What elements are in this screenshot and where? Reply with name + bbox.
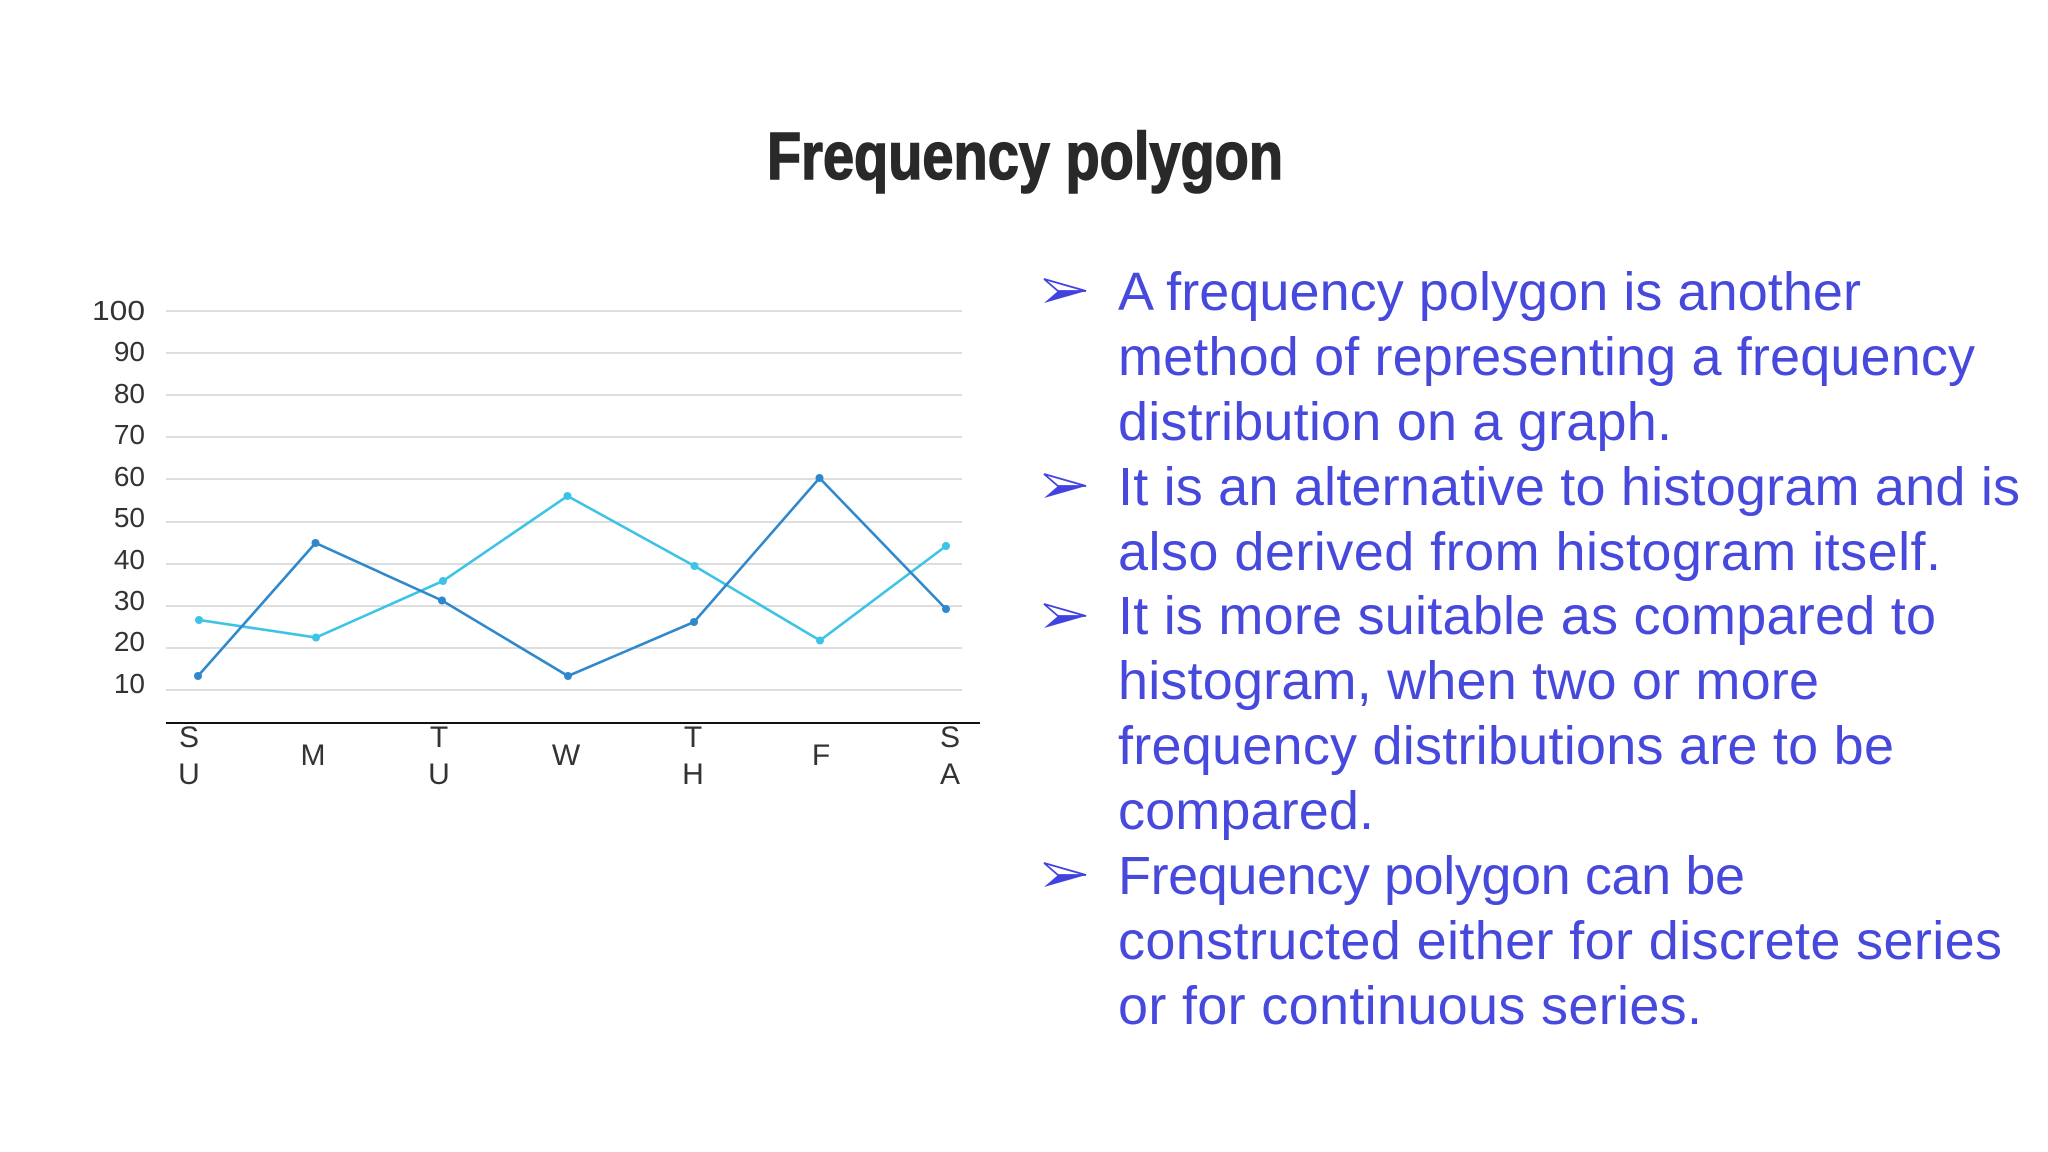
x axis labels: A (940, 758, 960, 791)
y axis labels: 10 (114, 668, 145, 699)
line chart (92, 295, 980, 791)
series: light blue line (195, 492, 950, 644)
title: Frequency polygon (767, 119, 1283, 194)
text: point 4: or for continuous series. (1118, 976, 1702, 1036)
x axis labels: S (940, 721, 960, 754)
x axis labels: W (552, 739, 581, 772)
x axis labels: S (179, 721, 199, 754)
y axis labels: 80 (114, 378, 145, 409)
text: point 3: It is more suitable as compared to (1118, 586, 1936, 646)
icon: bullet arrow 4 (1044, 863, 1086, 887)
text: point 2 (1118, 457, 2020, 582)
y axis labels: 30 (114, 585, 145, 616)
text: point 4: Frequency polygon can be (1118, 846, 1745, 906)
y axis labels: 50 (114, 502, 145, 533)
text: point 4: constructed either for discrete series (1118, 911, 2002, 971)
x axis labels: F (812, 739, 830, 772)
x axis labels (178, 721, 960, 791)
text: point 3: frequency distributions are to be (1118, 716, 1894, 776)
y axis labels (92, 295, 145, 699)
x axis labels: M (300, 739, 326, 772)
text: point 4 (1118, 846, 2002, 1036)
text: point 3 (1118, 586, 1936, 841)
text: point 2: also derived from histogram itself. (1118, 522, 1941, 582)
text: point 2: It is an alternative to histogram and is (1118, 457, 2020, 517)
text: point 3: histogram, when two or more (1118, 651, 1819, 711)
y axis labels: 60 (114, 461, 145, 492)
text: point 1 (1118, 262, 1975, 452)
series: dark blue line (194, 474, 950, 680)
y axis labels: 70 (114, 419, 145, 450)
x axis labels: T (430, 721, 448, 754)
y axis labels: 40 (114, 544, 145, 575)
x axis labels: H (682, 758, 704, 791)
x axis line (166, 722, 980, 724)
bullet list (1044, 262, 2020, 1036)
y axis labels: 90 (114, 336, 145, 367)
grid lines (166, 311, 962, 690)
x axis labels: U (428, 758, 450, 791)
icon: bullet arrow 2 (1044, 474, 1086, 498)
text: point 3: compared. (1118, 781, 1374, 841)
y axis labels: 20 (114, 626, 145, 657)
x axis labels: U (178, 758, 200, 791)
text: point 1: A frequency polygon is another (1118, 262, 1861, 322)
icon: bullet arrow 3 (1044, 604, 1086, 628)
text: point 1: method of representing a frequency (1118, 327, 1975, 387)
y axis labels: 100 (92, 295, 145, 326)
icon: bullet arrow 1 (1044, 279, 1086, 303)
text: point 1: distribution on a graph. (1118, 392, 1672, 452)
x axis labels: T (684, 721, 702, 754)
